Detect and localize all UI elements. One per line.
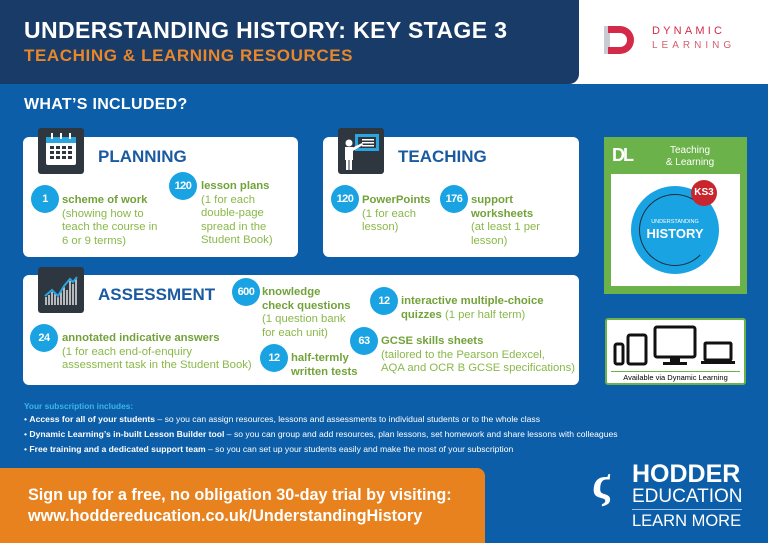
call to action — [0, 468, 485, 543]
text: PowerPoints — [362, 194, 430, 206]
text: (1 for each end-of-enquiry — [62, 346, 192, 358]
icon: teacher — [338, 128, 384, 174]
text: check questions — [262, 300, 351, 312]
subscription list: Your subscription includes: — [24, 401, 133, 411]
product cover: UNDERSTANDING — [651, 219, 699, 225]
heading: teaching: TEACHING — [398, 147, 487, 166]
text: teach the course in — [62, 221, 157, 233]
heading: what's included: WHAT’S INCLUDED? — [24, 96, 188, 113]
text: Student Book) — [201, 234, 273, 246]
item: knowledge check — [232, 278, 260, 306]
text: (1 for each — [362, 208, 416, 220]
item: powerpoints — [331, 185, 359, 213]
devices badge: Available via Dynamic Learning — [623, 373, 728, 382]
text: annotated indicative answers — [62, 332, 220, 344]
subscription list: • Free training and a dedicated support team – so you can set up your students easily and make the most of your subscription — [24, 444, 513, 454]
text: double-page — [201, 207, 264, 219]
item: annotated answers — [30, 324, 58, 352]
text: lesson) — [471, 235, 507, 247]
item: quizzes — [370, 287, 398, 315]
text: for each unit) — [262, 327, 328, 339]
text: (1 question bank — [262, 313, 346, 325]
subscription list: • Access for all of your students – so you can assign resources, lessons and assessments to individual students or to the whole class — [24, 414, 540, 424]
text: written tests — [291, 366, 358, 378]
subtitle: TEACHING & LEARNING RESOURCES — [24, 46, 353, 65]
item: half-termly tests — [260, 344, 288, 372]
text: support — [471, 194, 513, 206]
heading: planning: PLANNING — [98, 147, 187, 166]
item: powerpoints: 120 — [337, 193, 353, 205]
text: assessment task in the Student Book) — [62, 359, 252, 371]
subscription list — [24, 401, 618, 454]
devices badge — [605, 318, 746, 385]
logo: hodder education: ϛ — [592, 457, 611, 508]
text: (showing how to — [62, 208, 144, 220]
text: interactive multiple-choice — [401, 295, 544, 307]
item: worksheets: 176 — [446, 193, 462, 205]
text: lesson plans — [201, 180, 269, 192]
subscription list: • Dynamic Learning’s in-built Lesson Builder tool – so you can group and add resources, plan lessons, set homework and share lessons with colleagues — [24, 429, 618, 439]
item: knowledge check: 600 — [238, 286, 254, 298]
logo: hodder education: HODDER — [632, 460, 740, 488]
header bar — [0, 0, 768, 84]
product cover — [604, 137, 747, 294]
item: quizzes: 12 — [378, 295, 390, 307]
item: scheme of work: 1 — [42, 193, 48, 205]
text: knowledge — [262, 286, 320, 298]
product cover: KS3 — [694, 187, 714, 198]
text: (1 for each — [201, 194, 255, 206]
call to action: Sign up for a free, no obligation 30-day trial by visiting: — [28, 486, 452, 504]
text: scheme of work — [62, 194, 147, 206]
item: lesson plans: 120 — [175, 180, 191, 192]
logo: dynamic learning — [604, 25, 735, 54]
text: (tailored to the Pearson Edexcel, — [381, 349, 545, 361]
text: GCSE skills sheets — [381, 335, 483, 347]
logo: hodder education: LEARN MORE — [632, 512, 741, 530]
item: lesson plans — [169, 172, 197, 200]
call to action: www.hoddereducation.co.uk/UnderstandingHistory — [28, 507, 422, 525]
item: scheme of work — [31, 185, 59, 213]
text: spread in the — [201, 221, 266, 233]
icon: chart — [38, 267, 84, 313]
logo: hodder education: EDUCATION — [632, 486, 742, 507]
item: GCSE skills sheets — [350, 327, 378, 355]
logo: hodder education — [592, 457, 742, 530]
text: AQA and OCR B GCSE specifications) — [381, 362, 575, 374]
text: worksheets — [471, 208, 533, 220]
title: UNDERSTANDING HISTORY: KEY STAGE 3 — [24, 17, 507, 43]
icon: calendar — [38, 128, 84, 174]
product cover: DL — [612, 145, 632, 165]
logo: dynamic learning: DYNAMIC — [652, 25, 725, 37]
product cover: Teaching — [670, 145, 710, 156]
panel: assessment — [23, 275, 579, 385]
item: half-termly tests: 12 — [268, 352, 280, 364]
panel: planning — [23, 137, 298, 257]
item: worksheets — [440, 185, 468, 213]
item: annotated answers: 24 — [38, 332, 50, 344]
item: GCSE skills sheets: 63 — [358, 335, 370, 347]
text: (at least 1 per — [471, 221, 540, 233]
product cover: & Learning — [666, 157, 714, 168]
product cover: HISTORY — [646, 226, 704, 241]
panel: teaching — [323, 137, 579, 257]
text: half-termly — [291, 352, 349, 364]
heading: assessment: ASSESSMENT — [98, 285, 215, 304]
text: quizzes (1 per half term) — [401, 309, 525, 321]
text: 6 or 9 terms) — [62, 235, 126, 247]
logo: dynamic learning: LEARNING — [652, 40, 735, 51]
text: lesson) — [362, 221, 398, 233]
